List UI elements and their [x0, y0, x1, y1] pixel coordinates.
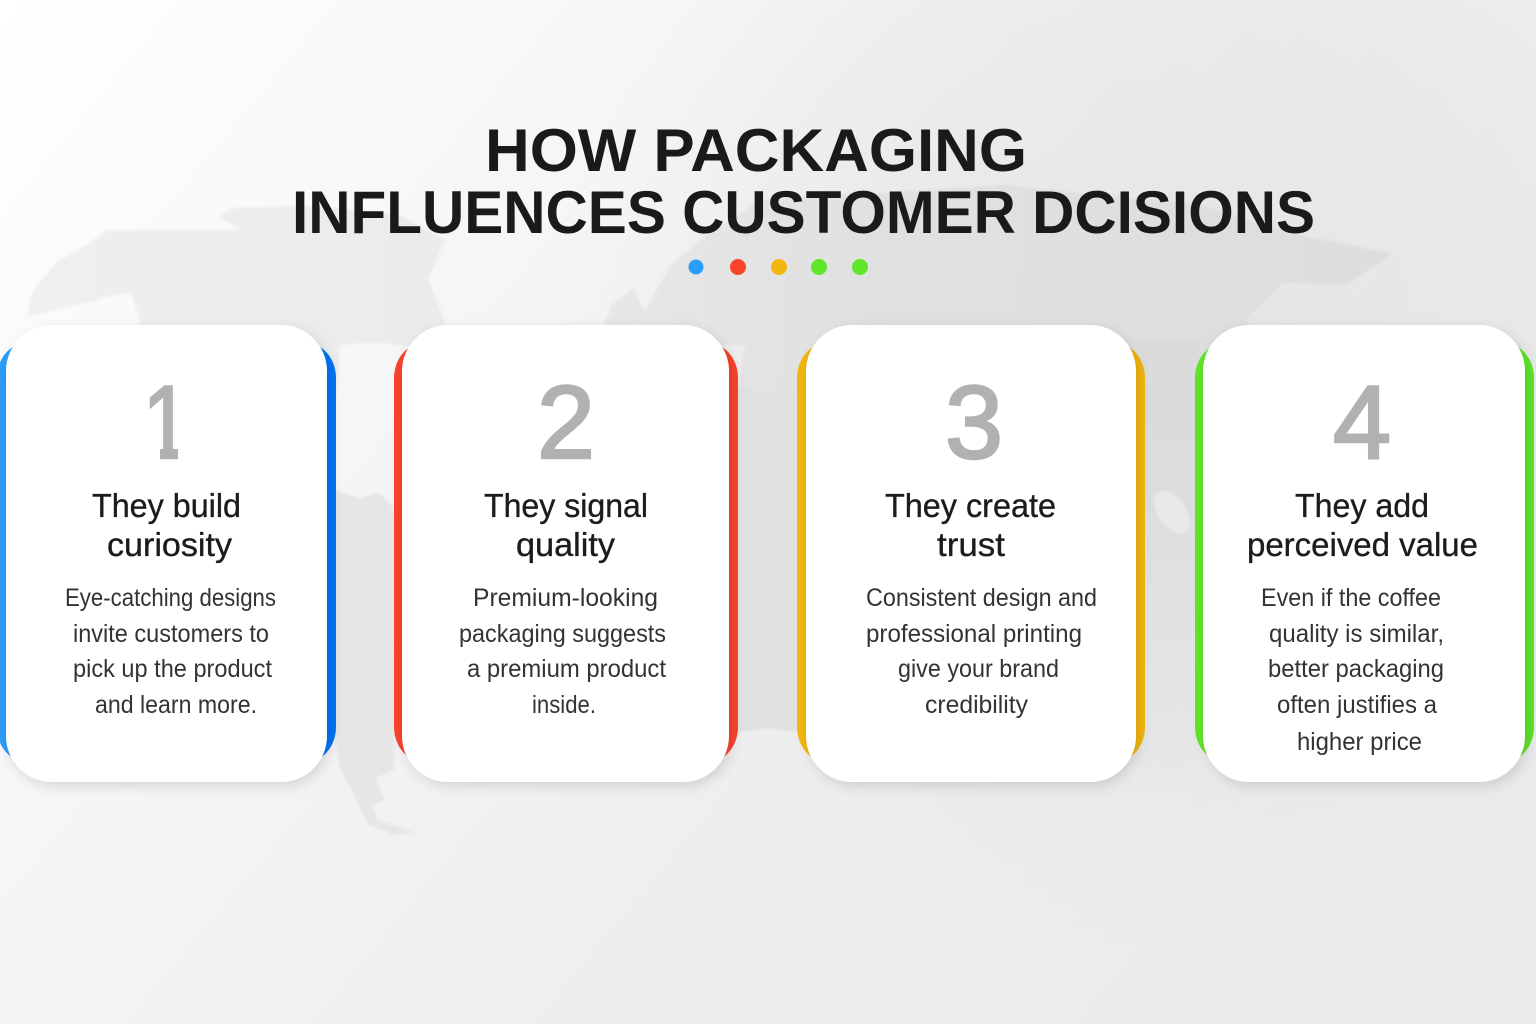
body text 1 — [65, 584, 276, 719]
title: INFLUENCES CUSTOMER DCISIONS — [292, 179, 1315, 246]
title — [292, 117, 1315, 246]
body text 2: a premium product — [467, 655, 666, 683]
heading: they signal quality: They signal — [484, 487, 648, 524]
body text 1: and learn more. — [95, 691, 257, 719]
heading: they add perceived value — [1247, 487, 1478, 563]
panel: card 1 — [0, 325, 336, 782]
heading: they add perceived value: perceived value — [1247, 526, 1478, 563]
title: HOW PACKAGING — [485, 117, 1027, 184]
body text 1: pick up the product — [73, 655, 272, 683]
body text 4: higher price — [1297, 728, 1422, 756]
body text 4: better packaging — [1268, 655, 1444, 683]
heading: they signal quality: quality — [516, 526, 616, 563]
body text 3: give your brand — [898, 655, 1059, 683]
body text 3: professional printing — [866, 620, 1082, 648]
body text 1: Eye-catching designs — [65, 584, 276, 612]
heading: they build curiosity: curiosity — [107, 526, 233, 563]
map light patch — [1147, 484, 1197, 540]
body text 4: quality is similar, — [1269, 620, 1444, 648]
body text 2: Premium-looking — [473, 584, 658, 612]
body text 4 — [1261, 584, 1444, 756]
body text 2: inside. — [532, 691, 596, 719]
body text 3: Consistent design and — [866, 584, 1097, 612]
heading: they build curiosity — [92, 487, 241, 563]
body text 3: credibility — [925, 691, 1028, 719]
heading: they build curiosity: They build — [92, 487, 241, 524]
panel: card 3 — [797, 325, 1145, 782]
body text 4: often justifies a — [1277, 691, 1437, 719]
number 2: 2 — [537, 365, 595, 481]
heading: they signal quality — [484, 487, 648, 563]
body text 4: Even if the coffee — [1261, 584, 1441, 612]
panel: card 2 — [394, 325, 738, 782]
body text 2: packaging suggests — [459, 620, 666, 648]
number 4: 4 — [1333, 365, 1391, 481]
heading: they create trust: trust — [937, 526, 1005, 563]
number 1: 1 — [142, 365, 190, 481]
heading: they create trust: They create — [885, 487, 1056, 524]
panel: card 4 — [1195, 325, 1534, 782]
heading: they add perceived value: They add — [1295, 487, 1429, 524]
body text 1: invite customers to — [73, 620, 269, 648]
heading: they create trust — [885, 487, 1056, 563]
body text 3 — [866, 584, 1097, 719]
body text 2 — [459, 584, 666, 719]
decorative colored dots — [688, 259, 868, 275]
world map backdrop — [27, 185, 1393, 835]
number 3: 3 — [945, 365, 1003, 481]
